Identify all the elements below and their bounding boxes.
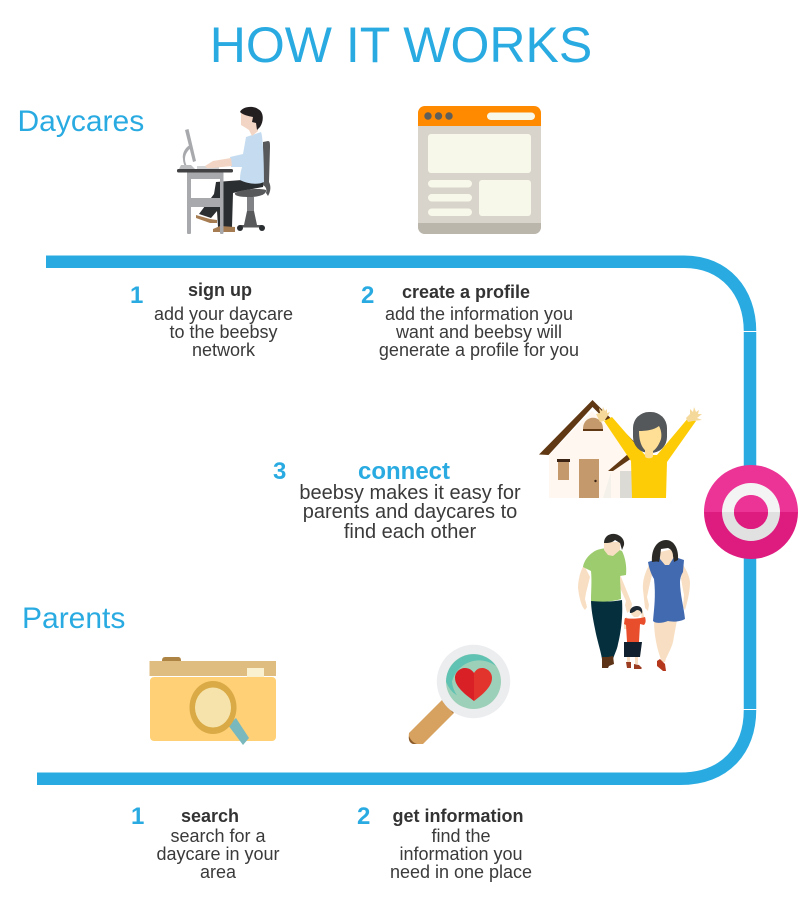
step: sign up: to the beebsy [169, 322, 278, 342]
icon: folder with magnifier [150, 657, 276, 745]
step: connect: connect [358, 458, 450, 485]
icon: person at desk [177, 107, 270, 234]
timeline connector [37, 262, 750, 779]
step: get information: information you [399, 844, 523, 864]
step: search: daycare in your [156, 844, 280, 864]
step: connect [273, 458, 521, 543]
icon: magnifier with heart [409, 645, 510, 744]
step: search: search [181, 806, 239, 826]
step: create a profile: want and beebsy will [395, 322, 562, 342]
step: create a profile [361, 282, 579, 360]
step: connect: parents and daycares to [303, 501, 517, 523]
step: search: area [200, 862, 237, 882]
step: get information: find the [431, 826, 491, 846]
icon: browser window [418, 106, 541, 234]
step: get information: 2 [357, 803, 370, 830]
step: create a profile: 2 [361, 282, 374, 309]
heading: Parents: Parents [22, 602, 125, 635]
step: get information: get information [392, 806, 524, 826]
heading: Daycares: Daycares [18, 105, 144, 138]
step: sign up [130, 280, 293, 360]
step: connect: beebsy makes it easy for [299, 482, 521, 504]
title: HOW IT WORKS [210, 17, 592, 73]
step: get information [357, 803, 532, 882]
step: sign up: 1 [130, 282, 143, 309]
icon: family walking [578, 534, 690, 671]
step: create a profile: create a profile [402, 282, 530, 302]
step: sign up: network [192, 340, 256, 360]
icon: house and waving woman [539, 400, 702, 498]
step: connect: find each other [344, 521, 476, 543]
icon: pink target marker [704, 440, 798, 570]
step: search: search for a [170, 826, 267, 846]
step: sign up: add your daycare [154, 304, 293, 324]
step: search [131, 803, 280, 882]
step: sign up: sign up [188, 280, 252, 300]
step: get information: need in one place [390, 862, 532, 882]
step: connect: 3 [273, 458, 286, 485]
step: search: 1 [131, 803, 144, 830]
step: create a profile: generate a profile for you [379, 340, 579, 360]
step: create a profile: add the information you [385, 304, 573, 324]
woman's yellow top [604, 417, 696, 498]
